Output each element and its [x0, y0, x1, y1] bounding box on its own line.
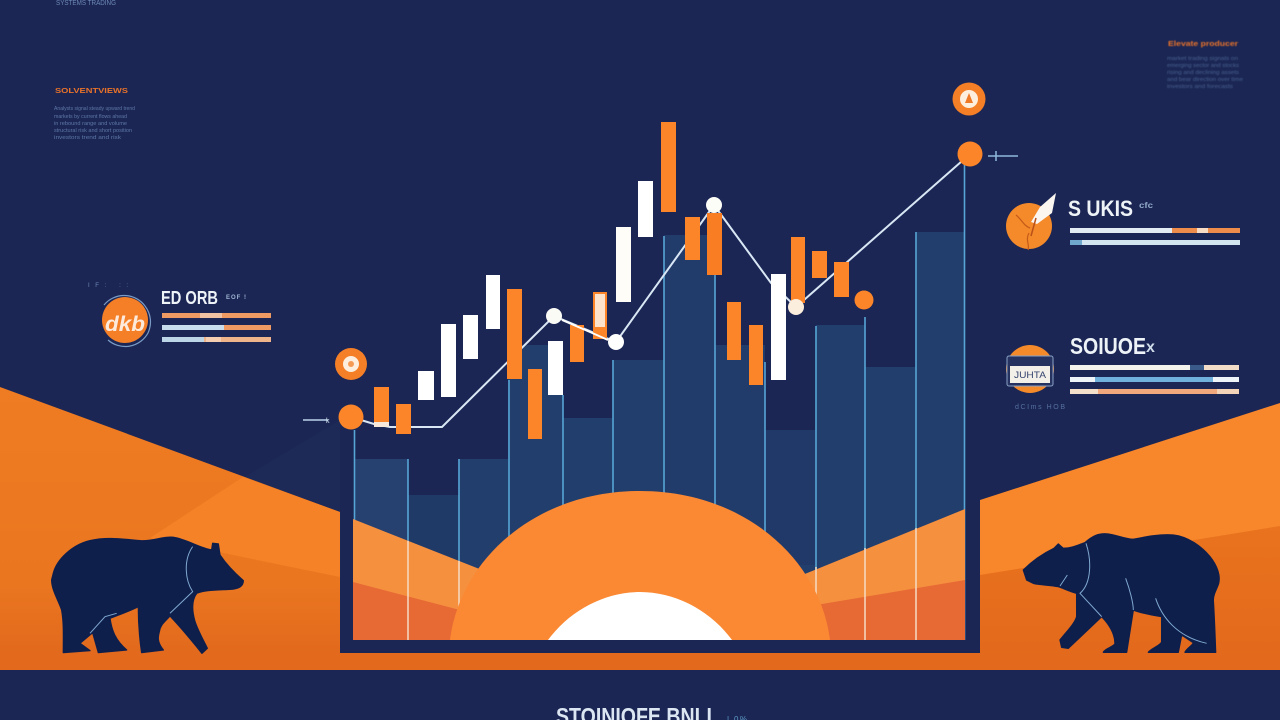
rising sun: [450, 491, 830, 640]
callout: top right text: [1167, 39, 1243, 90]
icon: rocket badge: [1006, 193, 1056, 250]
right upper bars: [1070, 228, 1240, 245]
faint light ray: [243, 420, 340, 512]
callout: top left text: in rebound range and volume: [54, 121, 127, 127]
left stat bars: [162, 313, 271, 342]
icon: left stat badge: [102, 295, 150, 347]
bar chart: column edge lines: [354, 165, 964, 640]
candlesticks: [374, 122, 849, 439]
bar chart: background columns: [354, 232, 965, 640]
panel: central chart frame: [340, 165, 980, 653]
icon: left marker badge: [335, 348, 367, 380]
callout: top left text: structural risk and short position: [54, 128, 132, 134]
right orange ground: [980, 403, 1280, 670]
icon: label badge: JUHTA: [1014, 370, 1046, 380]
badge caption: dCIms HOB: [1015, 404, 1065, 411]
callout: top right text: emerging sector and stocks: [1167, 63, 1239, 69]
panel: right lower stat: [1006, 333, 1239, 411]
panel: left stat: [88, 283, 271, 347]
callout: top right text: market trading signals on: [1167, 56, 1238, 62]
right upper note: cfc: [1139, 201, 1154, 210]
frame border: [340, 500, 980, 653]
callout: top left text: [54, 86, 135, 141]
icon: top marker badge: [952, 82, 986, 116]
callout: top left text: markets by current flows ahead: [54, 114, 127, 120]
icon: label badge: [1006, 345, 1054, 393]
arrow: left pointer: k: [326, 418, 330, 425]
left stat note: EOF !: [226, 295, 246, 301]
callout: top left text: investors trend and risk: [54, 135, 121, 141]
right lower heading: SOIUOE: [1070, 333, 1146, 359]
bottom orange band: [0, 653, 1280, 670]
callout: top right text: and bear direction over time: [1167, 77, 1243, 83]
trend segment over candle: [562, 320, 608, 340]
right lower bars: [1070, 365, 1239, 394]
callout: top right text: Elevate producer: [1168, 39, 1238, 48]
icon: right bear: [1023, 534, 1219, 652]
trend line data points: [338, 142, 982, 430]
panel: right upper stat: [1006, 193, 1240, 250]
callout: top right text: rising and declining assets: [1167, 70, 1239, 76]
icon: left stat badge: dkb: [105, 313, 145, 336]
price trend line: [351, 154, 970, 427]
callout: top right text: investors and forecasts: [1167, 84, 1233, 90]
left stat heading: ED ORB: [161, 288, 218, 308]
callout: top left text: SOLVENTVIEWS: [55, 86, 128, 95]
arrow: right pointer: [988, 151, 1018, 161]
icon: left bear: [52, 537, 243, 653]
sun core: [548, 592, 732, 640]
callout: top left text: Analysts signal steady upward trend: [54, 106, 135, 112]
right lower note: x: [1146, 339, 1155, 356]
top left caption: SYSTEMS TRADING: [56, 0, 116, 7]
panel orange hills: [353, 509, 965, 640]
left orange ground: [0, 387, 340, 670]
left stat small note: IF: ::: [88, 283, 128, 289]
arrow: left pointer: [303, 418, 330, 425]
right upper heading: S UKIS: [1068, 196, 1133, 221]
